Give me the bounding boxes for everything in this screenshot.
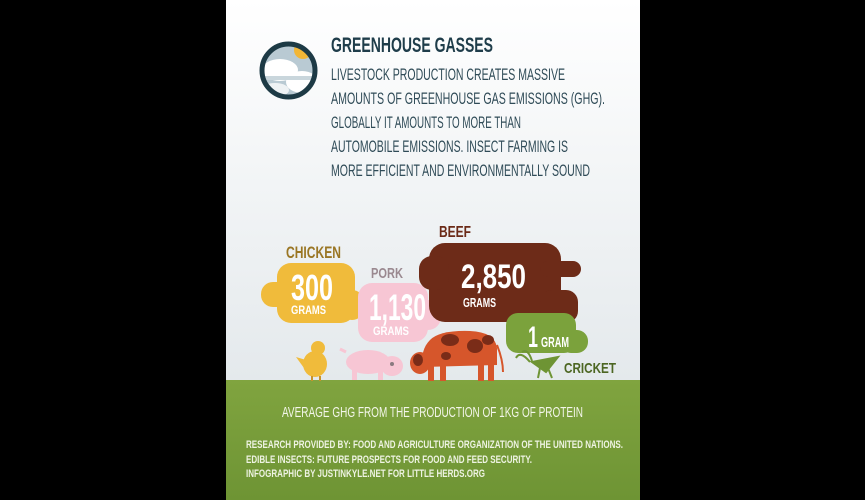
caption: AVERAGE GHG FROM THE PRODUCTION OF 1KG OF PROTEIN bbox=[282, 404, 583, 421]
icon: cricket bbox=[516, 351, 558, 378]
icon: cloud badge bbox=[261, 41, 322, 97]
panel: pork value: 1,130 bbox=[369, 287, 426, 328]
text block: credits: INFOGRAPHIC BY JUSTINKYLE.NET FOR LITTLE HERDS.ORG bbox=[246, 468, 485, 480]
icon: pig bbox=[340, 349, 403, 380]
panel: chicken value: 300 bbox=[291, 267, 333, 308]
text block: intro: MORE EFFICIENT AND ENVIRONMENTALLY SOUND bbox=[331, 162, 590, 180]
text block: credits: EDIBLE INSECTS: FUTURE PROSPECTS FOR FOOD AND FEED SECURITY. bbox=[246, 454, 532, 466]
panel: beef value: BEEF bbox=[439, 224, 471, 241]
panel: beef value bbox=[419, 224, 581, 323]
panel: pork value bbox=[358, 265, 441, 342]
text block: credits: RESEARCH PROVIDED BY: FOOD AND AGRICULTURE ORGANIZATION OF THE UNITED NATIONS. bbox=[246, 439, 623, 451]
panel: cricket value bbox=[506, 313, 616, 377]
panel: beef value: GRAMS bbox=[463, 295, 496, 310]
panel: chicken value: GRAMS bbox=[291, 303, 326, 317]
panel: cricket value: GRAM bbox=[541, 334, 569, 351]
panel: background bbox=[226, 0, 640, 381]
panel: cricket value: 1 bbox=[528, 321, 538, 354]
panel: pork value: PORK bbox=[371, 265, 403, 282]
text block: intro: AUTOMOBILE EMISSIONS. INSECT FARMING IS bbox=[331, 138, 568, 156]
text block: intro: AMOUNTS OF GREENHOUSE GAS EMISSIONS (GHG). bbox=[331, 90, 605, 108]
icon: cow bbox=[410, 331, 503, 381]
ground bbox=[226, 380, 640, 500]
panel: cricket value: CRICKET bbox=[564, 360, 616, 377]
title: GREENHOUSE GASSES bbox=[331, 34, 493, 57]
icon: chicken bbox=[296, 341, 327, 381]
text block: intro: LIVESTOCK PRODUCTION CREATES MASSIVE bbox=[331, 66, 565, 84]
text block: credits bbox=[246, 439, 623, 480]
panel: chicken value bbox=[261, 243, 364, 323]
panel: pork value: GRAMS bbox=[373, 324, 409, 338]
panel: beef value: 2,850 bbox=[461, 258, 526, 296]
text block: intro: GLOBALLY IT AMOUNTS TO MORE THAN bbox=[331, 114, 521, 132]
panel: chicken value: CHICKEN bbox=[286, 243, 341, 262]
text block: intro bbox=[331, 66, 605, 180]
